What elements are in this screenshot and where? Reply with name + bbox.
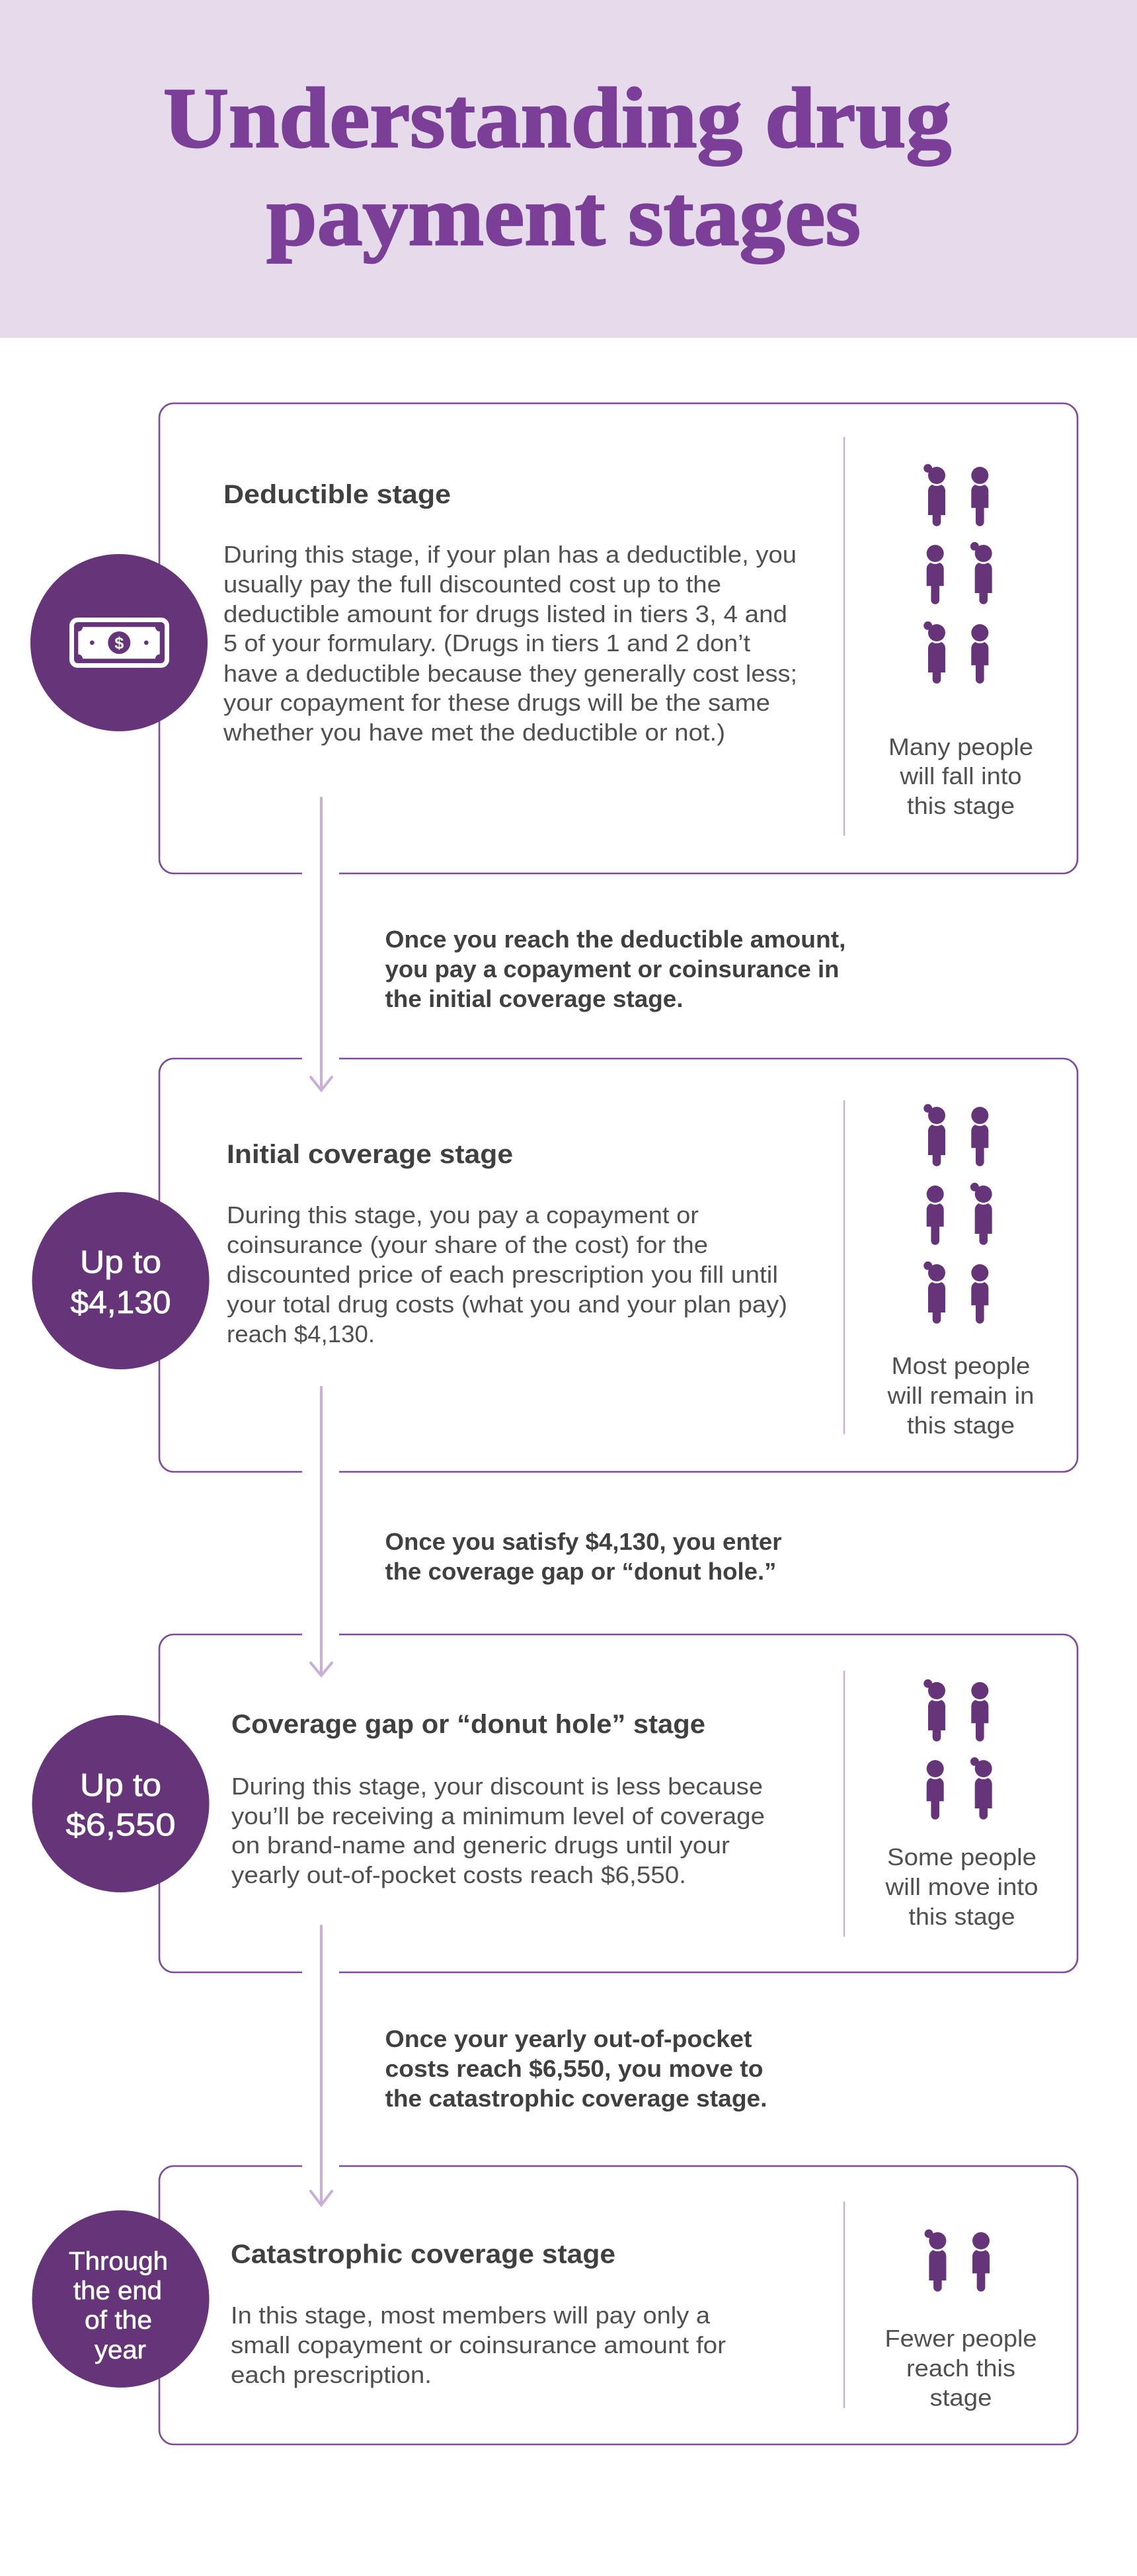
side note (884, 1843, 1038, 1930)
heading: Catastrophic coverage stage (231, 2240, 615, 2269)
body text: your total drug costs (what you and your plan pay) (227, 1291, 787, 1318)
people icons (925, 2230, 990, 2292)
badge: through the end of the year: Through (69, 2247, 168, 2276)
panel: coverage gap stage (32, 1634, 1078, 1972)
body text: discounted price of each prescription you fill until (227, 1261, 778, 1288)
badge: money icon: $ (114, 634, 124, 653)
side note: stage (929, 2384, 992, 2411)
body text: 5 of your formulary. (Drugs in tiers 1 and 2 don’t (223, 629, 750, 657)
badge: money icon (30, 554, 208, 731)
badge: through the end of the year (32, 2210, 209, 2388)
transition text 2 (385, 1528, 781, 1585)
body text (227, 1201, 787, 1348)
body text: yearly out-of-pocket costs reach $6,550. (231, 1861, 686, 1888)
transition text 1 (385, 926, 846, 1012)
header banner (0, 0, 1137, 338)
people icons (923, 1679, 992, 1820)
transition text 1: the initial coverage stage. (385, 985, 684, 1012)
arrow: initial coverage to coverage gap (311, 1387, 332, 1675)
body text: During this stage, you pay a copayment or (227, 1201, 699, 1228)
badge: up to $6,550: $6,550 (66, 1808, 176, 1843)
side note: Fewer people (884, 2325, 1037, 2352)
transition text 1: Once you reach the deductible amount, (385, 926, 846, 953)
badge: up to $6,550: Up to (80, 1768, 161, 1803)
transition text 3: costs reach $6,550, you move to (385, 2055, 763, 2082)
arrow: deductible to initial coverage (311, 798, 332, 1090)
body text: coinsurance (your share of the cost) for the (227, 1231, 708, 1258)
transition text 3: Once your yearly out-of-pocket (385, 2025, 752, 2052)
badge: up to $4,130: Up to (80, 1245, 161, 1280)
card border (159, 2166, 1078, 2444)
title: Understanding drug (163, 71, 951, 166)
people icons (923, 464, 992, 684)
body text: During this stage, if your plan has a deductible, you (223, 541, 797, 568)
panel: deductible stage (30, 403, 1078, 873)
side note: this stage (907, 792, 1015, 819)
card border (159, 403, 1078, 873)
body text: you’ll be receiving a minimum level of coverage (231, 1802, 765, 1830)
side note: will move into (884, 1873, 1038, 1900)
body text (223, 541, 797, 746)
side note: will remain in (886, 1382, 1034, 1409)
side note: Most people (891, 1352, 1030, 1379)
badge: through the end of the year: year (95, 2336, 146, 2364)
card border (159, 1059, 1078, 1472)
transition text 2: the coverage gap or “donut hole.” (385, 1558, 776, 1585)
transition text 3: the catastrophic coverage stage. (385, 2085, 767, 2112)
card border (159, 1634, 1078, 1972)
body text (231, 2302, 726, 2388)
side note: this stage (907, 1412, 1015, 1439)
body text: each prescription. (231, 2361, 432, 2388)
side note: Some people (887, 1843, 1037, 1871)
body text: reach $4,130. (227, 1320, 375, 1348)
panel: catastrophic coverage stage (32, 2166, 1078, 2444)
body text: whether you have met the deductible or not.) (223, 719, 725, 746)
side note: this stage (908, 1903, 1015, 1930)
body text: on brand-name and generic drugs until your (231, 1831, 730, 1859)
side note: Many people (888, 733, 1033, 760)
heading: Initial coverage stage (227, 1140, 513, 1169)
body text (231, 1773, 765, 1888)
transition text 2: Once you satisfy $4,130, you enter (385, 1528, 781, 1555)
heading: Deductible stage (223, 480, 451, 509)
title: payment stages (266, 169, 861, 264)
people icons (923, 1104, 992, 1324)
title (163, 71, 951, 264)
badge: up to $4,130: $4,130 (70, 1285, 171, 1320)
body text: deductible amount for drugs listed in tiers 3, 4 and (223, 600, 787, 627)
body text: usually pay the full discounted cost up to the (223, 571, 721, 598)
transition text 1: you pay a copayment or coinsurance in (385, 955, 840, 983)
panel: initial coverage stage (32, 1059, 1078, 1472)
badge: through the end of the year: of the (85, 2306, 152, 2335)
heading: Coverage gap or “donut hole” stage (231, 1710, 705, 1739)
body text: your copayment for these drugs will be the same (223, 689, 770, 716)
body text: During this stage, your discount is less because (231, 1773, 763, 1800)
transition text 3 (385, 2025, 767, 2112)
body text: In this stage, most members will pay only a (231, 2302, 711, 2329)
body text: have a deductible because they generally cost less; (223, 660, 797, 687)
side note: reach this (906, 2355, 1015, 2382)
badge: up to $4,130 (32, 1192, 209, 1369)
side note (884, 2325, 1037, 2411)
side note (888, 733, 1033, 819)
body text: small copayment or coinsurance amount for (231, 2331, 726, 2358)
side note: will fall into (899, 762, 1022, 789)
side note (886, 1352, 1034, 1439)
badge: up to $6,550 (32, 1715, 209, 1892)
badge: through the end of the year: the end (73, 2277, 162, 2305)
arrow: coverage gap to catastrophic (311, 1926, 332, 2205)
